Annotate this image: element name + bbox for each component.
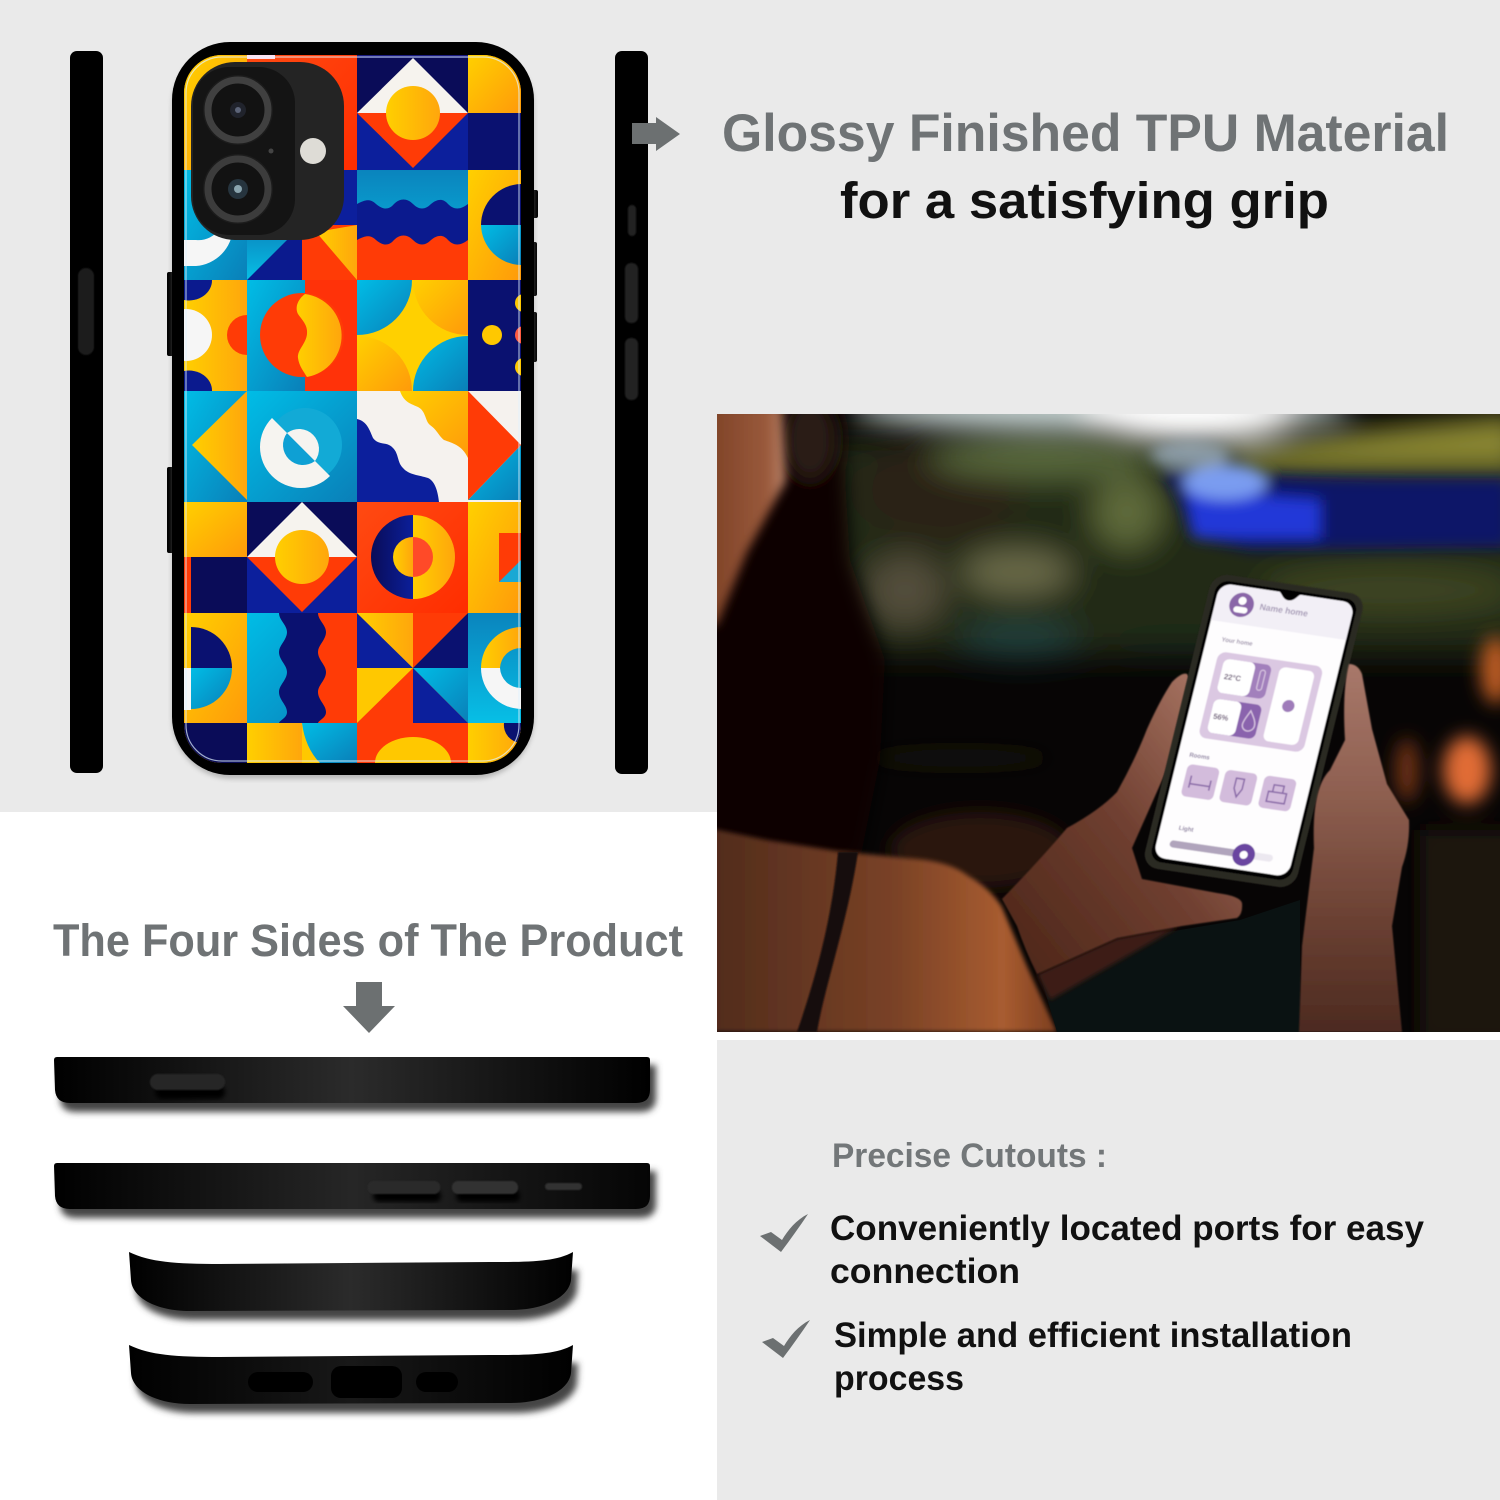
light slider [1169, 840, 1273, 867]
row 1 [184, 170, 247, 280]
phone screen: Rooms [1188, 752, 1211, 762]
row 5 [184, 613, 247, 723]
camera module [191, 62, 344, 240]
bokeh lights [870, 636, 1500, 1040]
icon: check mark 2 [762, 1320, 810, 1358]
white gap line below photo [717, 1032, 1500, 1040]
icon: check mark 1 [760, 1214, 808, 1252]
side strip: view 3 [129, 1252, 578, 1320]
dark clothing under hands [1040, 900, 1300, 1032]
heading: material [722, 104, 1449, 229]
feature text 1: connection [830, 1252, 1020, 1291]
blurred scenery background [800, 433, 1500, 658]
background panel: material heading [717, 0, 1500, 414]
heading: material: Glossy Finished TPU Material [722, 104, 1449, 163]
blurred blue water [1150, 441, 1500, 550]
app labels: Name home [1259, 602, 1309, 619]
split circle [260, 293, 344, 377]
camera flash [300, 138, 326, 164]
feature text 2: Simple and efficient installation [834, 1316, 1352, 1355]
subheading: precise cutouts: Precise Cutouts : [832, 1137, 1107, 1175]
lifestyle photo: person holding phone [700, 382, 1500, 1040]
side strip: view 2 [54, 1163, 656, 1218]
arrow pointing down to side views [343, 982, 395, 1033]
shoulder and arm [700, 826, 1057, 1032]
row 0 [184, 55, 230, 138]
case buttons [167, 190, 538, 553]
phone screen: Light [1178, 825, 1194, 834]
port cutouts [248, 1366, 458, 1398]
side strip: view 4 [129, 1345, 578, 1413]
avatar [1228, 592, 1254, 618]
left side view of case [70, 51, 103, 773]
face [717, 414, 794, 630]
row 2 [184, 280, 247, 391]
feature text 2 [834, 1316, 1352, 1398]
cut ring [260, 418, 330, 488]
background panel: cutouts [717, 1040, 1500, 1500]
phone case back view [160, 42, 538, 779]
heading: material: for a satisfying grip [840, 172, 1329, 229]
row 4 [184, 502, 247, 557]
arrow pointing to material heading [632, 117, 680, 151]
sky glow and far hills [842, 414, 1500, 480]
background panel: product showcase [0, 0, 717, 812]
smartphone [1141, 573, 1366, 889]
climate card: 22°C [1223, 672, 1242, 683]
row 3 [184, 391, 247, 502]
left hand [1002, 674, 1242, 974]
right side view of case [615, 51, 648, 774]
row 6 [184, 723, 247, 763]
phone screen: Your home [1221, 636, 1254, 648]
hair [778, 414, 887, 676]
room tiles [1180, 764, 1297, 812]
climate card [1198, 651, 1324, 753]
feature text 1: Conveniently located ports for easy [830, 1209, 1425, 1248]
right hand [1299, 664, 1409, 1032]
climate card: 56% [1212, 712, 1230, 723]
geometric pattern print [160, 55, 533, 763]
camera lens top [203, 75, 273, 145]
feature text 1 [830, 1209, 1425, 1291]
feature text 2: process [834, 1359, 964, 1398]
camera lens bottom [203, 154, 273, 224]
phone screen [1153, 582, 1355, 877]
camera microphone [268, 148, 274, 154]
side strip: view 1 [54, 1057, 656, 1112]
heading: four sides: The Four Sides of The Product [53, 915, 683, 966]
